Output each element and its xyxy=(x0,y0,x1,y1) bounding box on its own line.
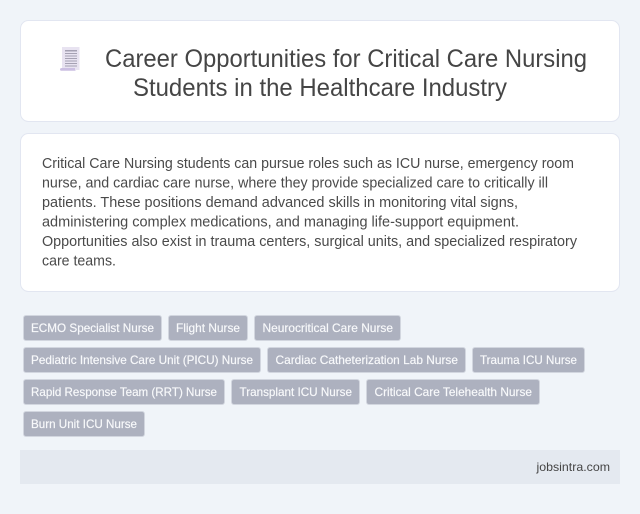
text block: description: nurse, and cardiac care nurse, where they provide specialized care to critically ill xyxy=(42,176,548,192)
text block: description: administering complex medications, and managing life-support equipment. xyxy=(42,214,519,230)
tag: Flight Nurse: Flight Nurse xyxy=(176,321,240,335)
tag: Critical Care Telehealth Nurse xyxy=(366,380,540,404)
title: Students in the Healthcare Industry xyxy=(133,74,507,102)
tag: Critical Care Telehealth Nurse: Critical Care Telehealth Nurse xyxy=(374,385,532,399)
tag: Rapid Response Team Nurse xyxy=(24,380,224,404)
text block: description xyxy=(42,156,578,270)
tag: Cardiac Catheterization Lab Nurse xyxy=(268,348,466,372)
tag: ECMO Specialist Nurse xyxy=(24,316,162,340)
text block: description: care teams. xyxy=(42,254,116,270)
footer bar xyxy=(20,450,620,484)
tag: Trauma ICU Nurse xyxy=(472,348,584,372)
footer source text: jobsintra.com xyxy=(535,460,610,474)
text block: description: patients. These positions demand advanced skills in monitoring vital signs, xyxy=(42,195,518,211)
tag: Neurocritical Care Nurse: Neurocritical Care Nurse xyxy=(262,321,393,335)
tag: Cardiac Catheterization Lab Nurse: Cardiac Catheterization Lab Nurse xyxy=(276,353,458,367)
tag: PICU Nurse xyxy=(24,348,260,372)
tag: Transplant ICU Nurse: Transplant ICU Nurse xyxy=(240,385,352,399)
panel: description card xyxy=(20,134,620,292)
tag: Rapid Response Team Nurse: Rapid Response Team (RRT) Nurse xyxy=(31,385,217,399)
tag: ECMO Specialist Nurse: ECMO Specialist Nurse xyxy=(31,321,154,335)
title xyxy=(105,45,587,102)
tag: Burn Unit ICU Nurse xyxy=(24,412,144,436)
tag list xyxy=(24,316,584,436)
tag: Flight Nurse xyxy=(168,316,248,340)
tag: Burn Unit ICU Nurse: Burn Unit ICU Nurse xyxy=(31,417,137,431)
icon: document scroll xyxy=(60,47,80,71)
tag: Trauma ICU Nurse: Trauma ICU Nurse xyxy=(480,353,577,367)
text block: description: Critical Care Nursing students can pursue roles such as ICU nurse, emergency room xyxy=(42,156,574,172)
panel: header card xyxy=(20,20,620,122)
text block: description: Opportunities also exist in trauma centers, surgical units, and specialized respiratory xyxy=(42,234,578,250)
tag: Neurocritical Care Nurse xyxy=(254,316,400,340)
title: Career Opportunities for Critical Care Nursing xyxy=(105,45,587,73)
tag: PICU Nurse: Pediatric Intensive Care Unit (PICU) Nurse xyxy=(31,353,253,367)
tag: Transplant ICU Nurse xyxy=(232,380,360,404)
